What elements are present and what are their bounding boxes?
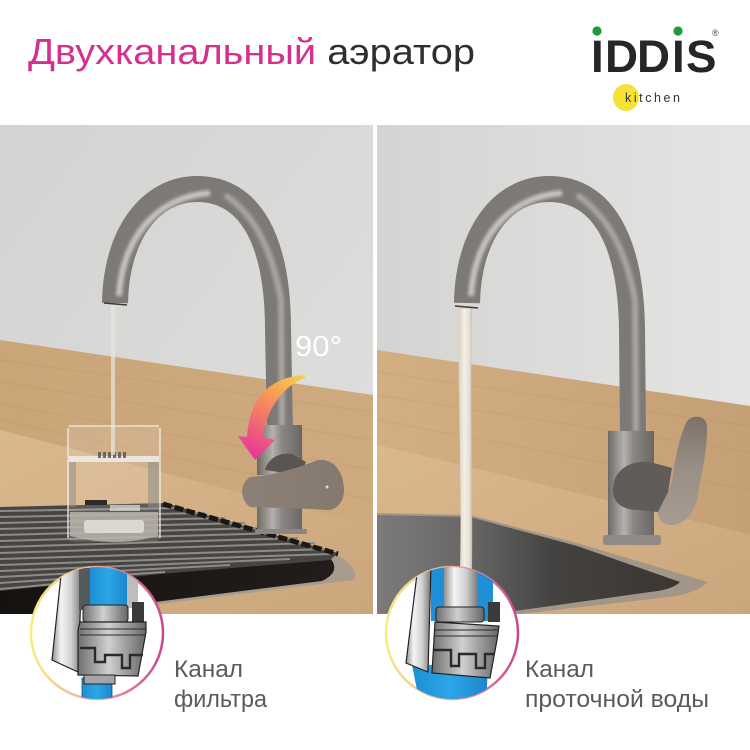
glass of water xyxy=(68,425,160,542)
panel: right photo, running water channel xyxy=(377,125,750,614)
drying mat xyxy=(0,503,338,591)
full water stream xyxy=(458,309,472,570)
callout label: filter channel: фильтра xyxy=(174,686,268,713)
callout label: filter channel: Канал xyxy=(174,656,243,683)
sink xyxy=(377,513,708,614)
callout: filter channel cutaway xyxy=(31,566,163,703)
label: 90 degrees: 90° xyxy=(295,331,342,363)
callout label: running water channel: проточной воды xyxy=(525,686,709,713)
logo: IDDIS kitchen: kitchen xyxy=(625,91,680,105)
blue water channel xyxy=(412,665,488,699)
faucet with raised handle xyxy=(455,189,707,545)
blue water pipe xyxy=(90,567,127,606)
panel: left photo, filter channel xyxy=(0,125,373,614)
faucet with handle turned 90 degrees xyxy=(104,189,344,534)
thin filtered water stream xyxy=(111,305,115,455)
title: Двухканальный аэратор xyxy=(28,31,475,72)
logo: IDDIS kitchen: ® xyxy=(712,28,719,38)
sink xyxy=(156,555,356,606)
logo: IDDIS kitchen: IDDIS xyxy=(591,31,717,82)
logo: IDDIS kitchen xyxy=(591,26,719,111)
callout: running water channel cutaway xyxy=(386,566,518,705)
arrow: rotate handle xyxy=(238,375,305,460)
callout label: running water channel: Канал xyxy=(525,656,594,683)
